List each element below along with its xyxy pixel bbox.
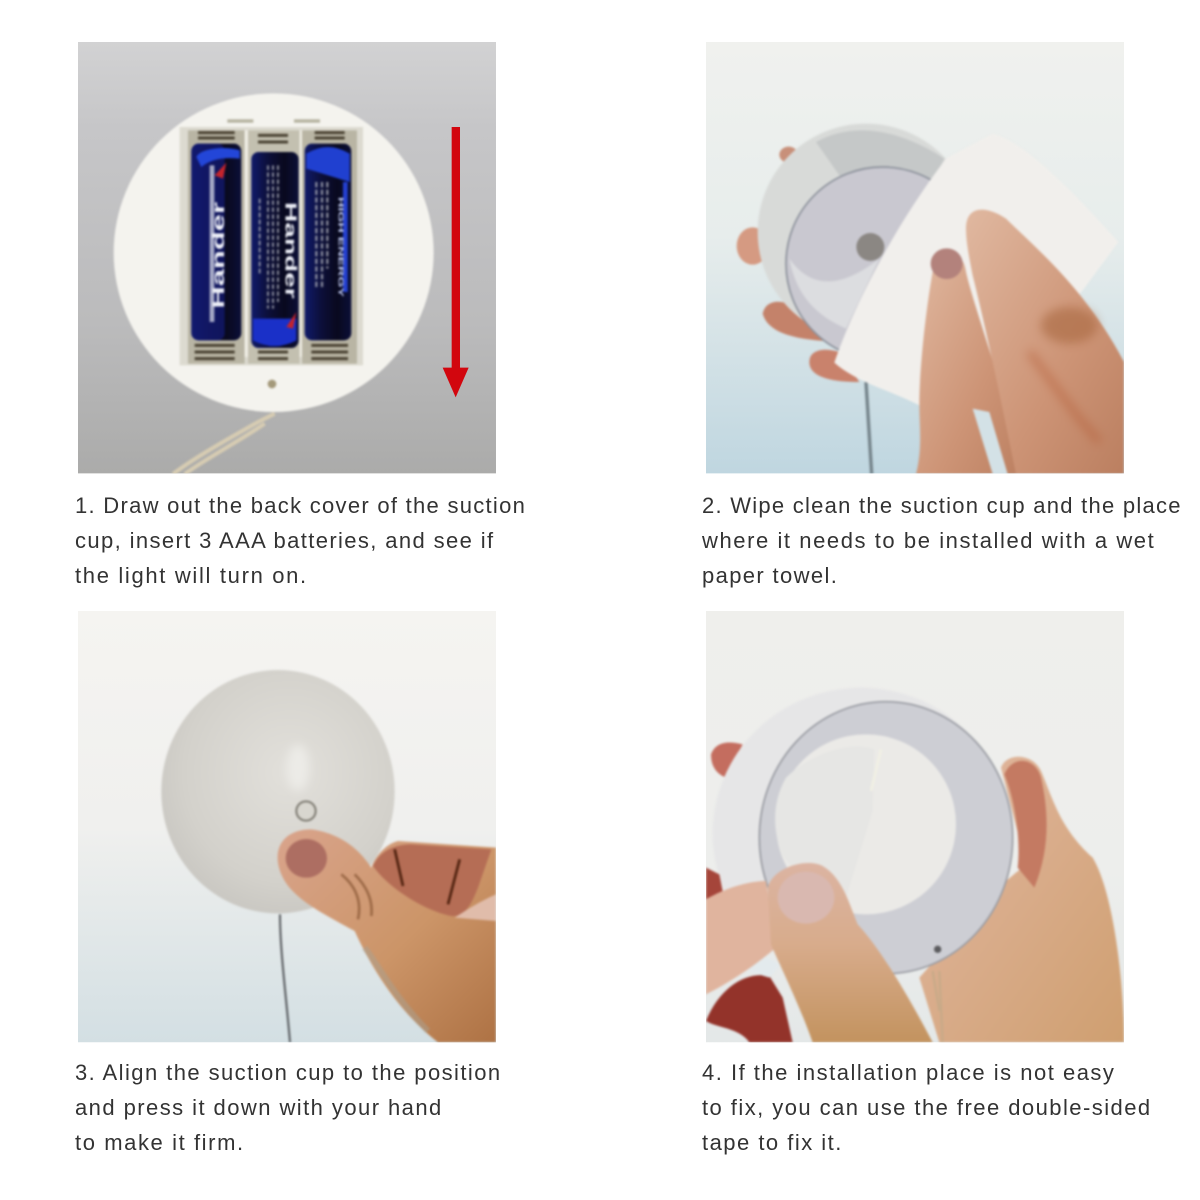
text: step 3 caption: 3. Align the suction cup to the position	[75, 1060, 502, 1085]
upper finger	[966, 210, 1124, 474]
text: step 2 caption: where it needs to be installed with a wet	[702, 528, 1155, 553]
knuckle shade	[1041, 307, 1098, 344]
fingers in shadow	[373, 844, 491, 916]
fingernail	[931, 248, 963, 279]
thumbnail	[286, 839, 327, 878]
screw hole	[934, 946, 941, 953]
text: step 4 caption: tape to fix it.	[702, 1130, 843, 1155]
battery middle	[251, 152, 299, 348]
button	[296, 801, 316, 821]
lower finger	[915, 261, 1018, 474]
battery labels: Hander	[209, 201, 228, 309]
battery right	[305, 144, 351, 340]
hand	[278, 829, 496, 1042]
left fingers	[737, 147, 859, 382]
wires	[933, 971, 943, 1042]
panel: step 3 pressing photo	[78, 611, 496, 1042]
double-sided tape	[775, 734, 956, 914]
clip tabs	[227, 119, 253, 123]
text: step 3 caption	[75, 1060, 502, 1155]
knuckle creases	[341, 874, 372, 919]
text: step 2 caption: paper towel.	[702, 563, 838, 588]
right hand	[916, 210, 1124, 474]
gap between fingers	[761, 973, 772, 979]
red arrow	[443, 127, 469, 397]
text: step 1 caption: cup, insert 3 AAA batteries, and see if	[75, 528, 494, 553]
text: step 4 caption	[702, 1060, 1152, 1155]
text: step 1 caption: the light will turn on.	[75, 563, 308, 588]
paper towel	[834, 134, 1118, 405]
text: step 1 caption	[75, 493, 526, 588]
panel: step 4 tape photo	[706, 611, 1124, 1042]
suction cup back cover	[114, 93, 434, 412]
wire	[866, 382, 872, 474]
indicator dot	[268, 380, 276, 388]
panel: step 1 battery photo	[78, 42, 496, 474]
battery compartment	[180, 127, 363, 365]
thumbnail	[778, 872, 834, 924]
thumb and finger	[706, 863, 933, 1042]
panel: step 2 wiping photo	[706, 42, 1124, 474]
suction cup	[714, 689, 934, 880]
back hand	[711, 742, 1124, 1042]
text: step 3 caption: and press it down with your hand	[75, 1095, 443, 1120]
wires	[173, 414, 275, 474]
gap between fingers	[973, 409, 1008, 474]
battery compartment: Hander	[281, 202, 298, 299]
text: step 4 caption: to fix, you can use the free double-sided	[702, 1095, 1152, 1120]
text: step 1 caption: 1. Draw out the back cover of the suction	[75, 493, 526, 518]
suction cup	[756, 123, 945, 320]
wire	[280, 914, 290, 1042]
springs	[195, 133, 348, 359]
battery left	[191, 144, 241, 340]
suction cup front	[161, 670, 395, 913]
text: step 2 caption	[702, 493, 1182, 588]
left dark fingers	[706, 975, 793, 1042]
text: step 4 caption: 4. If the installation place is not easy	[702, 1060, 1115, 1085]
text: step 2 caption: 2. Wipe clean the suction cup and the place	[702, 493, 1182, 518]
battery compartment: HIGH ENERGY	[337, 197, 346, 297]
text: step 3 caption: to make it firm.	[75, 1130, 245, 1155]
